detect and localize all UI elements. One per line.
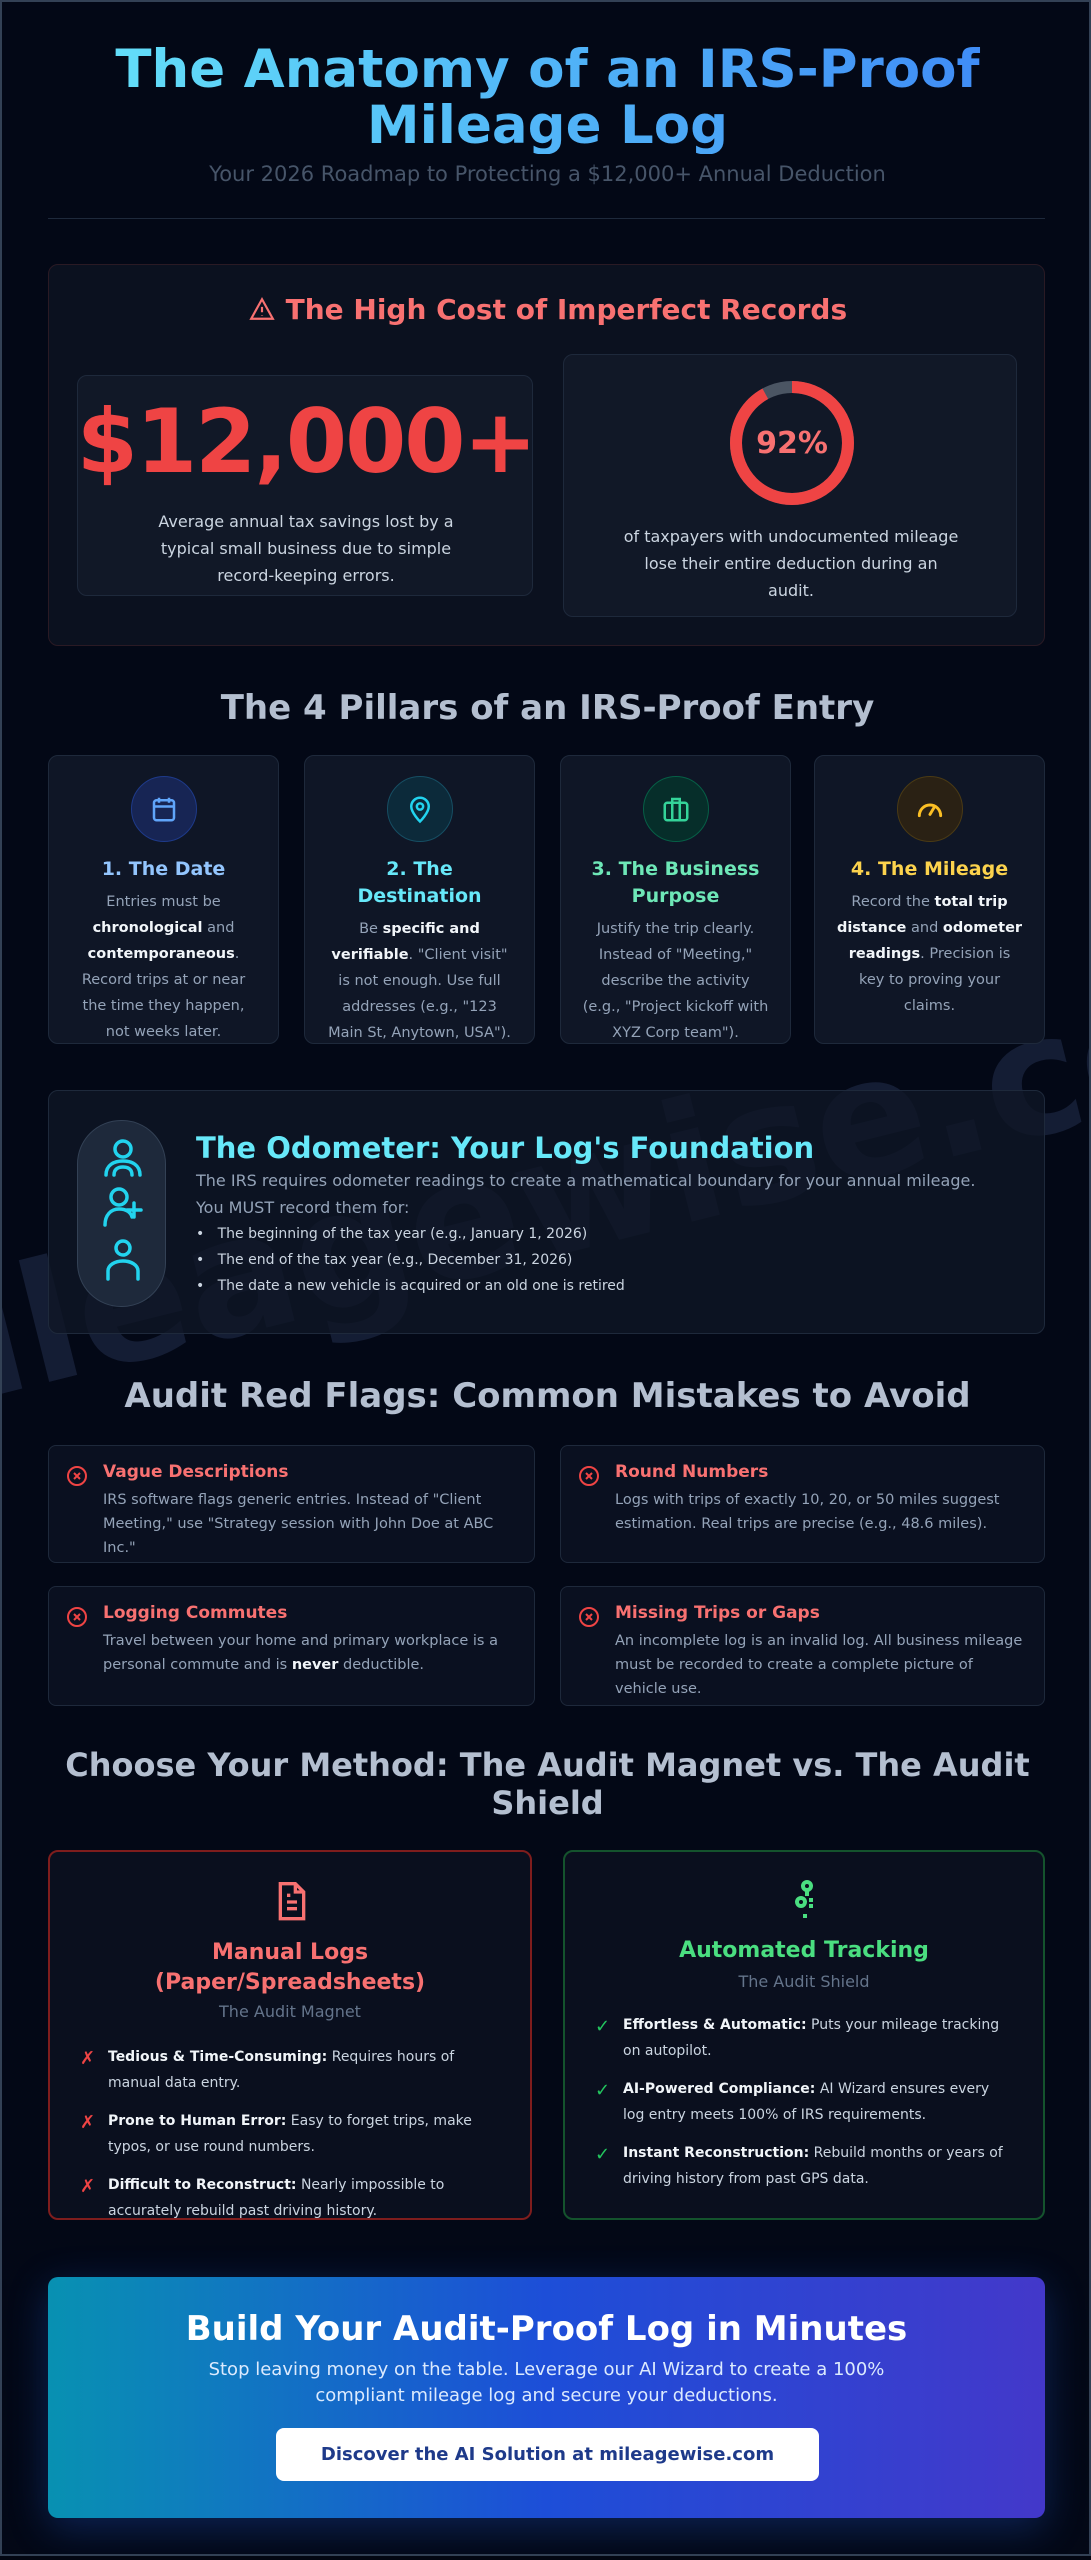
pillar 2 [304, 755, 535, 1044]
panel: automated tracking [563, 1850, 1045, 2220]
panel: automated tracking: AI-Powered Compliance: AI Wizard ensures every log entry meets 100% of IRS requirements. [623, 2081, 989, 2123]
flag: commutes: Travel between your home and primary workplace is a personal commute and is never deductible. [103, 1633, 498, 1673]
CTA heading: Build Your Audit-Proof Log in Minutes [186, 2309, 907, 2349]
heading: red flags: Audit Red Flags: Common Mistakes to Avoid [124, 1376, 971, 1416]
panel: manual logs: (Paper/Spreadsheets) [155, 1970, 425, 1995]
pillar 3: Justify the trip clearly. Instead of "Meeting," describe the activity (e.g., "Project kickoff with XYZ Corp team"). [583, 921, 768, 1041]
heading: 4 pillars: The 4 Pillars of an IRS-Proof Entry [221, 688, 874, 728]
CTA banner [48, 2277, 1045, 2518]
panel: manual logs: ✗ [80, 2176, 95, 2197]
odometer heading: The Odometer: Your Log's Foundation [196, 1131, 814, 1165]
panel: manual logs: ✗ [80, 2048, 95, 2069]
icon: tracking [795, 1880, 813, 1918]
title [2, 42, 1091, 154]
pillar 4: Record the total trip distance and odometer readings. Precision is key to proving your claims. [837, 894, 1022, 1014]
odometer bullets: • The end of the tax year (e.g., December 31, 2026) [196, 1252, 572, 1268]
stat card: 92% donut [563, 354, 1017, 617]
panel: manual logs: Tedious & Time-Consuming: Requires hours of manual data entry. [108, 2049, 454, 2091]
flag: round numbers: Round Numbers [615, 1462, 768, 1482]
icon: briefcase [642, 776, 708, 842]
stat card: $12,000+ [77, 375, 533, 596]
panel: odometer [48, 1090, 1045, 1334]
pillar 4 [814, 755, 1045, 1044]
panel: automated tracking: Automated Tracking [679, 1938, 929, 1963]
flag: gaps: An incomplete log is an invalid log. All business mileage must be recorded to create a complete picture of vehicle use. [615, 1633, 1022, 1697]
panel: automated tracking: ✓ [595, 2080, 610, 2101]
panel: manual logs: The Audit Magnet [219, 2002, 361, 2021]
pillar 3: 3. The Business Purpose [592, 858, 759, 907]
panel: automated tracking: ✓ [595, 2144, 610, 2165]
flag: round numbers [560, 1445, 1045, 1563]
flag: commutes [48, 1586, 535, 1706]
donut chart [730, 381, 854, 505]
pillar 3 [560, 755, 791, 1044]
icon: gauge [896, 776, 962, 842]
pillar 2: Destination [357, 885, 482, 907]
subtitle: Your 2026 Roadmap to Protecting a $12,000+ Annual Deduction [209, 162, 886, 186]
pillar 1: Entries must be chronological and contemporaneous. Record trips at or near the time they happen, not weeks later. [82, 894, 245, 1040]
CTA button: Discover the AI Solution at mileagewise.com [321, 2444, 774, 2465]
panel: automated tracking: The Audit Shield [738, 1972, 870, 1991]
panel: automated tracking: ✓ [595, 2016, 610, 2037]
panel: manual logs: Manual Logs [212, 1940, 368, 1965]
odometer bullets [196, 1226, 625, 1294]
flag: commutes: Logging Commutes [103, 1603, 287, 1623]
pillar 1 [48, 755, 279, 1044]
stat card: 92% donut: of taxpayers with undocumented mileage lose their entire deduction during an audit. [624, 527, 958, 600]
pillar 2: 2. The [386, 858, 453, 880]
panel: manual logs: Prone to Human Error: Easy to forget trips, make typos, or use round numbers. [108, 2113, 472, 2155]
flag: gaps [560, 1586, 1045, 1706]
icon: document [278, 1882, 306, 1920]
pillar 4: 4. The Mileage [851, 858, 1008, 880]
heading: choose method: Choose Your Method: The Audit Magnet vs. The Audit Shield [65, 1746, 1030, 1822]
icon pill [77, 1120, 166, 1307]
panel: manual logs: ✗ [80, 2112, 95, 2133]
icon: calendar [130, 776, 196, 842]
CTA button [276, 2428, 819, 2481]
flag: vague: Vague Descriptions [103, 1462, 288, 1482]
odometer bullets: • The beginning of the tax year (e.g., January 1, 2026) [196, 1226, 587, 1242]
pillar 2: Be specific and verifiable. "Client visit" is not enough. Use full addresses (e.g., "123 Main St, Anytown, USA"). [328, 921, 511, 1041]
stat card: $12,000+: Average annual tax savings lost by a typical small business due to simple record-keeping errors. [158, 512, 454, 585]
odometer text: The IRS requires odometer readings to create a mathematical boundary for your annual mileage. You MUST record them for: [196, 1171, 975, 1217]
icon: pin [386, 776, 452, 842]
CTA text: Stop leaving money on the table. Leverage our AI Wizard to create a 100% compliant mileage log and secure your deductions. [209, 2359, 884, 2406]
odometer bullets: • The date a new vehicle is acquired or an old one is retired [196, 1278, 625, 1294]
panel: automated tracking: Instant Reconstruction: Rebuild months or years of driving history from past GPS data. [623, 2145, 1003, 2187]
flag: gaps: Missing Trips or Gaps [615, 1603, 820, 1623]
flag: round numbers: Logs with trips of exactly 10, 20, or 50 miles suggest estimation. Real trips are precise (e.g., 48.6 miles). [615, 1492, 1000, 1532]
panel: automated tracking: Effortless & Automatic: Puts your mileage tracking on autopilot. [623, 2017, 999, 2059]
flag: vague [48, 1445, 535, 1563]
panel: high cost [48, 264, 1045, 646]
pillar 1: 1. The Date [102, 858, 225, 880]
heading: high cost: The High Cost of Imperfect Records [286, 293, 847, 326]
donut chart: 92% [756, 426, 828, 461]
panel: manual logs: Difficult to Reconstruct: Nearly impossible to accurately rebuild past driving history. [108, 2177, 444, 2219]
panel: manual logs [48, 1850, 532, 2220]
title: Mileage Log [367, 95, 728, 156]
flag: vague: IRS software flags generic entries. Instead of "Client Meeting," use "Strategy session with John Doe at ABC Inc." [103, 1492, 493, 1556]
title: The Anatomy of an IRS-Proof [115, 39, 980, 100]
stat card: $12,000+: $12,000+ [77, 390, 535, 493]
